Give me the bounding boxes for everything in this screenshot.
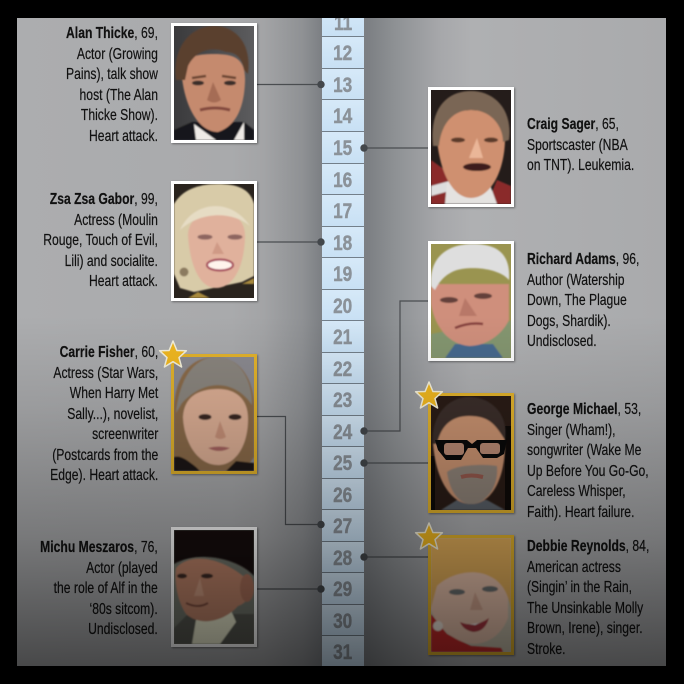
timeline: days of the month: 22 xyxy=(333,358,353,380)
timeline: days of the month: 28 xyxy=(333,546,353,570)
text: Alan Thicke: Alan Thicke, 69, xyxy=(66,25,158,42)
timeline: days of the month: 13 xyxy=(333,74,353,96)
text: George Michael xyxy=(527,401,649,521)
text: Michu Meszaros: ‘80s sitcom). xyxy=(90,600,158,618)
timeline: days of the month: 27 xyxy=(333,515,353,538)
text: Zsa Zsa Gabor xyxy=(43,191,158,290)
text: Michu Meszaros: Actor (played xyxy=(86,560,158,576)
text: Richard Adams: Down, The Plague xyxy=(527,292,627,309)
text: Craig Sager: on TNT). Leukemia. xyxy=(527,157,634,174)
timeline: days of the month: 15 xyxy=(333,137,353,160)
text: Richard Adams: Dogs, Shardik). xyxy=(527,312,611,330)
timeline: days of the month: 12 xyxy=(333,42,353,65)
timeline: days of the month: 26 xyxy=(333,484,353,506)
text: Michu Meszaros: Michu Meszaros, 76, xyxy=(40,539,158,556)
text: Alan Thicke xyxy=(66,25,158,144)
text: George Michael: Singer (Wham!), xyxy=(527,422,616,438)
text: Debbie Reynolds: American actress xyxy=(527,558,621,576)
text: Debbie Reynolds: (Singin’ in the Rain, xyxy=(527,579,632,596)
text: Debbie Reynolds: Debbie Reynolds, 84, xyxy=(527,538,649,555)
text: Zsa Zsa Gabor: Lili) and socialite. xyxy=(65,252,158,270)
text: Carrie Fisher: When Harry Met xyxy=(69,385,158,402)
text: Debbie Reynolds: The Unsinkable Molly xyxy=(527,600,643,616)
photo: Craig Sager xyxy=(428,87,514,207)
text: George Michael: George Michael, 53, xyxy=(527,401,641,418)
text: Carrie Fisher: (Postcards from the xyxy=(52,446,158,464)
text: Zsa Zsa Gabor: Rouge, Touch of Evil, xyxy=(43,232,158,249)
text: Craig Sager: Craig Sager, 65, xyxy=(527,116,619,133)
timeline: days of the month: 25 xyxy=(333,452,353,475)
photo: Carrie Fisher xyxy=(171,354,257,474)
timeline: days of the month: 21 xyxy=(333,326,353,349)
text: Carrie Fisher xyxy=(50,344,158,484)
text: George Michael: songwriter (Wake Me xyxy=(527,442,641,459)
text: Carrie Fisher: Sally...), novelist, xyxy=(67,406,158,422)
photo: Alan Thicke xyxy=(171,23,257,143)
text: Craig Sager: Sportscaster (NBA xyxy=(527,136,628,154)
text: Alan Thicke: Pains), talk show xyxy=(66,66,158,83)
text: Zsa Zsa Gabor: Actress (Moulin xyxy=(74,212,158,228)
timeline: days of the month: 20 xyxy=(333,294,353,318)
text: Zsa Zsa Gabor: Zsa Zsa Gabor, 99, xyxy=(50,191,158,208)
text: Alan Thicke: Thicke Show). xyxy=(81,107,158,124)
photo: George Michael xyxy=(428,393,514,513)
timeline: days of the month: 17 xyxy=(333,200,353,223)
text: Michu Meszaros xyxy=(40,539,158,638)
text: Carrie Fisher: Actress (Star Wars, xyxy=(53,364,158,382)
text: Debbie Reynolds: Brown, Irene), singer. xyxy=(527,620,643,637)
timeline: days of the month: 23 xyxy=(333,389,353,412)
icon: star George Michael xyxy=(414,381,444,409)
photo: Richard Adams xyxy=(428,241,514,361)
photo: Zsa Zsa Gabor xyxy=(171,181,257,301)
text: Zsa Zsa Gabor: Heart attack. xyxy=(89,273,158,290)
text: Richard Adams xyxy=(527,251,639,350)
photo: Michu Meszaros xyxy=(171,527,257,647)
text: George Michael: Up Before You Go-Go, xyxy=(527,462,649,480)
text: Alan Thicke: Actor (Growing xyxy=(77,46,158,62)
timeline: days of the month: 14 xyxy=(333,105,353,128)
text: Richard Adams: Richard Adams, 96, xyxy=(527,251,639,268)
text: Carrie Fisher: screenwriter xyxy=(92,426,158,443)
timeline: days of the month: 29 xyxy=(333,578,353,601)
text: Debbie Reynolds: Stroke. xyxy=(527,640,566,658)
timeline: days of the month: 31 xyxy=(333,641,353,664)
text: George Michael: Careless Whisper, xyxy=(527,483,626,500)
text: George Michael: Faith). Heart failure. xyxy=(527,504,634,520)
timeline: days of the month: 24 xyxy=(333,420,353,444)
timeline: days of the month: 30 xyxy=(333,610,353,632)
text: Carrie Fisher: Edge). Heart attack. xyxy=(50,467,158,484)
text: Debbie Reynolds xyxy=(527,538,649,658)
text: Alan Thicke: host (The Alan xyxy=(80,86,158,104)
text: Alan Thicke: Heart attack. xyxy=(89,128,158,144)
text: Richard Adams: Author (Watership xyxy=(527,272,625,288)
text: Michu Meszaros: Undisclosed. xyxy=(88,621,158,638)
text: Richard Adams: Undisclosed. xyxy=(527,333,597,350)
timeline: days of the month: 18 xyxy=(333,232,353,254)
icon: star Debbie Reynolds xyxy=(414,522,444,550)
text: Carrie Fisher: Carrie Fisher, 60, xyxy=(59,344,158,361)
text: Michu Meszaros: the role of Alf in the xyxy=(54,580,158,597)
timeline: days of the month: 16 xyxy=(333,168,353,192)
text: Craig Sager xyxy=(527,116,634,174)
icon: star Carrie Fisher xyxy=(158,340,188,368)
photo: Debbie Reynolds xyxy=(428,535,514,655)
timeline: days of the month: 19 xyxy=(333,263,353,286)
